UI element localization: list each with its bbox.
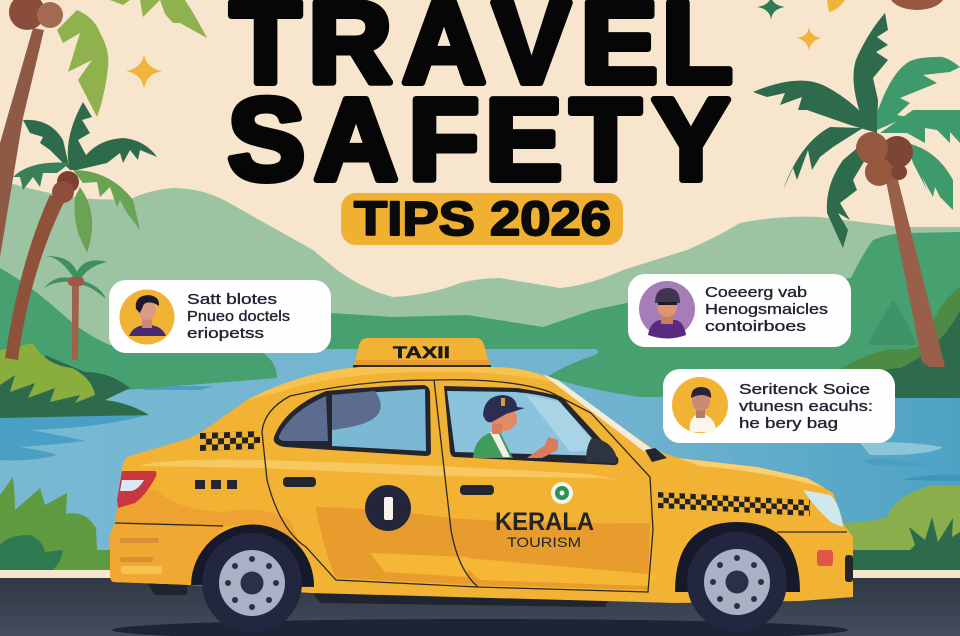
kerala tourism logo and text xyxy=(495,482,594,550)
callout: left tip: Pnueo doctels xyxy=(187,309,290,325)
water xyxy=(0,349,960,575)
body lighter roof highlight xyxy=(247,367,552,400)
taxi car xyxy=(110,338,853,633)
windshield trim xyxy=(542,374,660,455)
big right palm tree xyxy=(753,13,960,367)
callout: lower right tip xyxy=(663,369,895,443)
checker stripe front xyxy=(658,492,810,516)
callout: upper right tip xyxy=(628,274,851,347)
door number badge xyxy=(365,485,411,531)
title xyxy=(228,0,733,204)
roof taxi sign xyxy=(353,338,491,369)
bumper tone xyxy=(110,523,223,585)
icon: avatar man with glasses xyxy=(639,281,695,338)
callout: lower right tip: vtunesn eacuhs: xyxy=(739,399,873,415)
sparkle stars and top-right coconut xyxy=(126,0,945,89)
callout: left tip: eriopetss xyxy=(187,326,264,342)
callout: left tip: Satt blotes xyxy=(187,292,277,308)
title: SAFETY xyxy=(228,74,730,204)
callout: upper right tip: Henogsmaicles xyxy=(705,302,828,318)
driver xyxy=(473,395,558,458)
front bumper details xyxy=(777,532,853,582)
left foreground bush xyxy=(0,477,110,570)
icon: avatar man in purple xyxy=(120,290,174,344)
headlight xyxy=(803,490,843,527)
left island with shrubs xyxy=(0,343,149,418)
scenery: right shrubs xyxy=(825,287,960,398)
subtitle badge: TIPS 2026 xyxy=(354,193,611,246)
callout: lower right tip: Seritenck Soice xyxy=(739,382,870,398)
kerala tourism logo and text: KERALA xyxy=(495,508,594,536)
middle left palm tree xyxy=(5,102,157,360)
door lines xyxy=(262,380,653,592)
front window xyxy=(444,386,618,465)
rear side squares xyxy=(195,480,237,489)
callout: upper right tip: contoirboes xyxy=(705,319,806,335)
door handles xyxy=(283,477,316,487)
right foreground bush xyxy=(843,485,960,570)
car body xyxy=(110,367,853,603)
road and shoulder xyxy=(0,570,960,636)
scenery: green shores xyxy=(0,232,960,400)
small palm tree xyxy=(44,256,107,360)
body darker panel shading xyxy=(316,507,650,590)
icon: avatar man in white shirt xyxy=(672,377,728,433)
rear wheel xyxy=(191,524,314,633)
checker stripe rear xyxy=(200,431,260,451)
scenery: hills xyxy=(0,180,960,420)
underbody shadow xyxy=(311,590,611,607)
rear window xyxy=(274,385,431,456)
callout: left tip xyxy=(109,280,331,353)
front wheel xyxy=(675,522,800,632)
tail light xyxy=(117,471,156,508)
side mirror xyxy=(586,438,616,463)
rear bumper details xyxy=(115,523,223,574)
roof taxi sign: TAXII xyxy=(393,343,450,362)
callout: upper right tip: Coeeerg vab xyxy=(705,285,807,301)
callout: lower right tip: he bery bag xyxy=(739,416,838,432)
kerala tourism logo and text: TOURISM xyxy=(507,534,581,550)
big left palm tree xyxy=(0,0,207,257)
